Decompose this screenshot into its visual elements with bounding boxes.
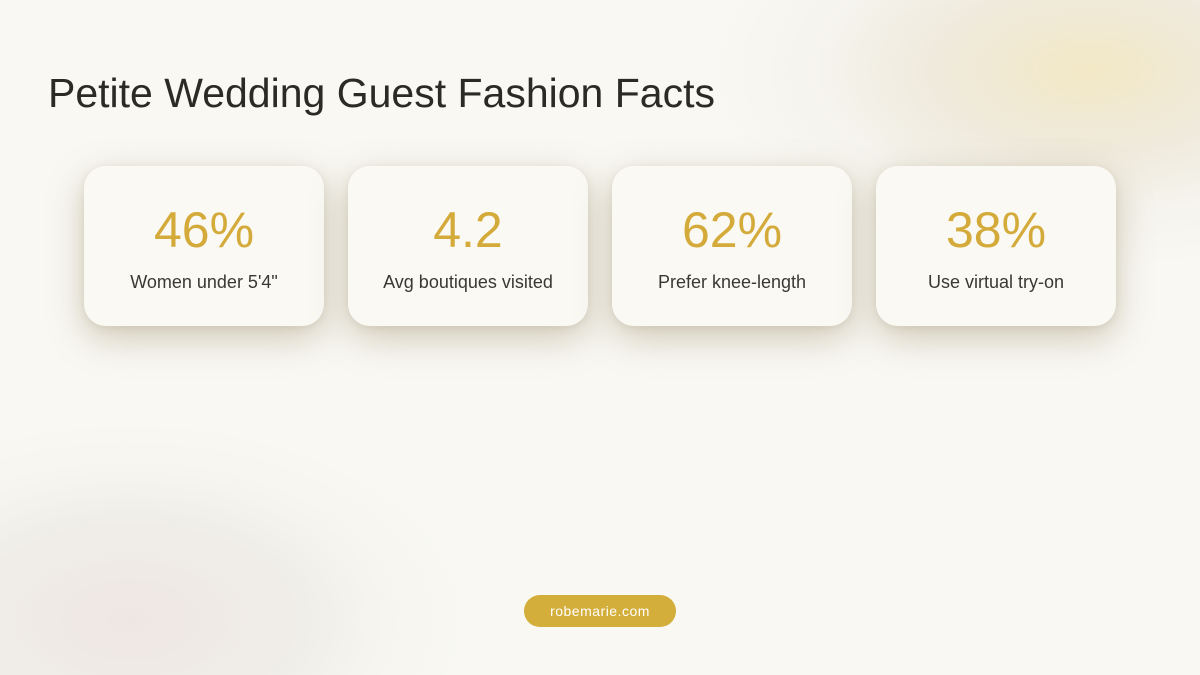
card: women under 5'4" <box>84 166 324 326</box>
footer badge <box>524 595 676 627</box>
card: knee-length: 62% <box>682 202 782 258</box>
title: Petite Wedding Guest Fashion Facts <box>48 70 715 116</box>
card: women under 5'4": Women under 5'4" <box>130 272 278 292</box>
card: boutiques visited: Avg boutiques visited <box>383 272 553 292</box>
card: virtual try-on: Use virtual try-on <box>928 272 1064 292</box>
card: virtual try-on <box>876 166 1116 326</box>
card: boutiques visited <box>348 166 588 326</box>
card: knee-length <box>612 166 852 326</box>
card: women under 5'4": 46% <box>154 202 254 258</box>
card: boutiques visited: 4.2 <box>433 202 503 258</box>
card: knee-length: Prefer knee-length <box>658 272 806 292</box>
footer badge: robemarie.com <box>550 603 650 619</box>
card: virtual try-on: 38% <box>946 202 1046 258</box>
